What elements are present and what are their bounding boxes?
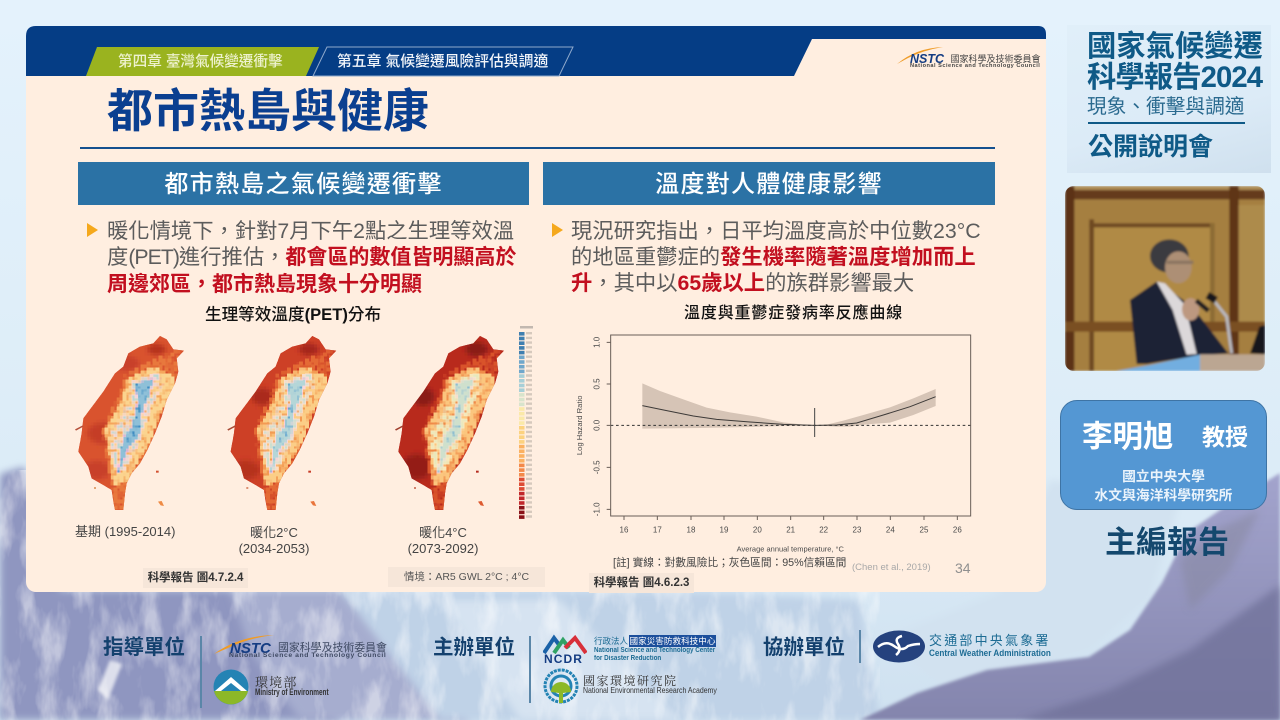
logo: Ministry of Environment: Ministry of Environment	[255, 686, 329, 696]
x axis labels: 24	[886, 526, 895, 535]
event type: 公開說明會	[1088, 133, 1213, 161]
role label: chief editor report: 主編報告	[1105, 525, 1229, 560]
event title line 1: 國家氣候變遷	[1087, 30, 1263, 63]
logo: NCDR: National Science and Technology Center	[594, 647, 715, 654]
x axis labels: 18	[687, 526, 696, 535]
panel: slide	[26, 26, 1046, 592]
logo: Central Weather Administration: Central Weather Administration	[929, 648, 1051, 659]
x axis labels: 17	[653, 526, 662, 535]
person	[1130, 282, 1228, 364]
speaker name: 李明旭	[1082, 420, 1174, 454]
panel heading: temperature health effects: 溫度對人體健康影響	[655, 171, 883, 198]
x axis labels: 25	[920, 526, 929, 535]
maps: PET distribution	[75, 326, 533, 519]
legend: PET colour scale	[519, 326, 533, 519]
map: baseline 1995-2014	[75, 336, 184, 510]
y axis labels: -0.5	[592, 460, 601, 474]
source tag: scenario note	[388, 567, 545, 587]
chart title: response curve: 溫度與重鬱症發病率反應曲線	[684, 305, 903, 322]
y axis labels: 1.0	[592, 336, 601, 348]
page number: 34	[955, 560, 971, 576]
x axis labels: 22	[819, 526, 829, 535]
text block: right description: 的地區重鬱症的發生機率隨著溫度增加而上	[571, 245, 976, 269]
map label: baseline: 基期 (1995-2014)	[75, 524, 175, 539]
icon: right bullet arrow	[552, 223, 563, 237]
logo: Central Weather Administration	[873, 630, 1051, 662]
logo: Central Weather Administration: 交通部中央氣象署	[929, 633, 1051, 648]
panel heading: temperature health effects	[543, 162, 995, 205]
text block: left description: 暖化情境下，針對7月下午2點之生理等效溫	[107, 219, 514, 243]
map label: warming 2 degrees: (2034-2053)	[239, 541, 309, 556]
speaker affiliation: 國立中央大學	[1122, 469, 1205, 484]
confidence band	[642, 383, 936, 429]
x axis labels: 20	[753, 526, 762, 535]
text block: left description: 度(PET)進行推估，都會區的數值皆明顯高於	[107, 245, 516, 269]
speaker affiliation: 水文與海洋科學研究所	[1095, 488, 1232, 503]
logo: National Environmental Research Academy	[544, 668, 717, 704]
logo: NCDR	[543, 634, 716, 666]
source tag: figure 4.7.2.4	[143, 568, 248, 588]
x axis labels: 16	[620, 526, 629, 535]
map: warming 2 degrees	[227, 336, 336, 510]
plot frame and ticks	[607, 335, 971, 520]
x axis labels: 21	[786, 526, 796, 535]
speaker affiliation	[1094, 469, 1232, 503]
panel heading: urban heat island climate impact	[78, 162, 529, 205]
x axis labels	[620, 526, 962, 535]
zero reference line	[611, 424, 971, 427]
panel: event title	[1067, 25, 1271, 173]
logo: Ministry of Environment	[214, 670, 329, 704]
logo: NSTC slide header: National Science and Technology Council	[910, 63, 1040, 69]
logo: NCDR: NCDR	[544, 652, 583, 666]
event subtitle: 現象、衝擊與調適	[1087, 96, 1244, 118]
text block: right description: 升，其中以65歲以上的族群影響最大	[571, 271, 914, 295]
logo: NSTC footer: National Science and Technology Council	[229, 652, 386, 659]
chart title: PET distribution: 生理等效溫度(PET)分布	[205, 305, 381, 324]
y axis labels: 0.5	[592, 378, 601, 390]
panel: speaker name card	[1060, 400, 1267, 510]
source tag: figure 4.6.2.3	[589, 573, 694, 593]
y axis labels: -1.0	[592, 502, 601, 516]
logo: NCDR: 行政法人	[594, 636, 628, 646]
map label: warming 4 degrees: 暖化4°C	[419, 525, 467, 540]
divider	[859, 630, 861, 663]
citation: (Chen et al., 2019)	[852, 562, 931, 573]
logo: National Environmental Research Academy: National Environmental Research Academy	[583, 686, 717, 694]
text block: right description	[571, 219, 981, 295]
text block: left description: 周邊郊區，都市熱島現象十分明顯	[107, 273, 422, 296]
podium	[1116, 355, 1200, 371]
footer heading: supervising unit: 指導單位	[103, 636, 185, 659]
x axis labels: 23	[853, 526, 862, 535]
source tag: figure 4.7.2.4: 科學報告 圖4.7.2.4	[148, 572, 243, 584]
map label: warming 4 degrees: (2073-2092)	[408, 541, 478, 556]
photo: speaker at podium	[1065, 186, 1265, 371]
chart note: [註] 實線：對數風險比；灰色區間：95%信賴區間	[613, 557, 846, 569]
divider	[200, 636, 202, 708]
footer heading: organising unit: 主辦單位	[433, 636, 515, 659]
logo: NSTC slide header: NSTC	[910, 52, 944, 66]
y axis labels: 0.0	[592, 419, 601, 431]
text block: left description	[107, 219, 516, 296]
title rule	[80, 147, 995, 149]
divider	[529, 636, 531, 703]
source tag: scenario note: 情境：AR5 GWL 2°C ; 4°C	[404, 571, 529, 583]
subtitle rule	[1088, 122, 1245, 124]
logo: NSTC slide header: 國家科學及技術委員會	[950, 54, 1041, 64]
logo: NSTC footer	[214, 635, 387, 659]
hazard ratio curve	[642, 397, 936, 425]
agency name tag: 國家災害防救科技中心	[630, 636, 715, 646]
x axis labels: 26	[953, 526, 962, 535]
y axis title: Log Hazard Ratio	[575, 396, 584, 455]
logo: NCDR: for Disaster Reduction	[594, 655, 661, 662]
logo: NSTC slide header	[897, 47, 1041, 69]
chapter tab: chapter four: 第四章 臺灣氣候變遷衝擊	[118, 54, 283, 70]
event title line 2: 科學報告2024	[1087, 61, 1262, 94]
speaker title: 教授	[1202, 424, 1248, 450]
footer heading: co-organiser: 協辦單位	[763, 636, 845, 659]
logo: NSTC footer: 國家科學及技術委員會	[278, 642, 387, 654]
x axis title: Average annual temperature, °C	[737, 545, 845, 554]
source tag: figure 4.6.2.3: 科學報告 圖4.6.2.3	[594, 577, 689, 589]
panel heading: urban heat island climate impact: 都市熱島之氣候變遷衝擊	[164, 171, 443, 198]
logo: National Environmental Research Academy: 國家環境研究院	[583, 674, 678, 688]
map label: warming 2 degrees: 暖化2°C	[250, 525, 298, 540]
microphone	[1213, 300, 1232, 353]
map label: warming 4 degrees	[408, 525, 478, 556]
map: warming 4 degrees	[395, 336, 504, 510]
text block: right description: 現況研究指出，日平均溫度高於中位數23°C	[571, 219, 981, 243]
logo: Ministry of Environment: 環境部	[255, 675, 298, 690]
logo: NSTC footer: NSTC	[230, 640, 271, 657]
title: 都市熱島與健康	[107, 85, 429, 137]
x axis labels: 19	[720, 526, 729, 535]
chapter tab: chapter five: 第五章 氣候變遷風險評估與調適	[337, 54, 548, 70]
slide header band with chapter tabs	[26, 26, 1046, 76]
y axis labels	[592, 336, 601, 516]
map label: warming 2 degrees	[239, 525, 309, 556]
icon: left bullet arrow	[87, 223, 98, 237]
